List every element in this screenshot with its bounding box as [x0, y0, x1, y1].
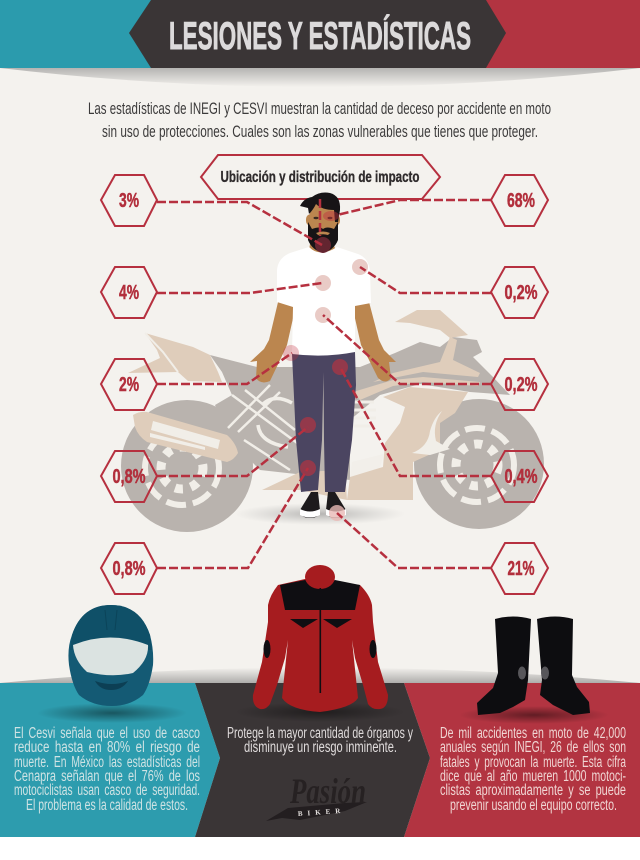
stat: 4% [101, 267, 157, 318]
stat: 0,8% upper [101, 451, 157, 502]
shoes [300, 492, 346, 518]
item shadows [37, 702, 609, 724]
logo: Pasión Biker: BIKER [298, 807, 346, 818]
stat: 2%: 2% [119, 374, 139, 396]
frame and engine [210, 337, 510, 480]
icon: boots [477, 616, 590, 715]
bottom shadow arc [0, 668, 640, 683]
stat: 0,4%: 0,4% [504, 466, 538, 488]
logo: Pasión Biker: Pasión [289, 771, 366, 811]
ground shadow [235, 503, 405, 525]
stat: 0,2% upper [491, 267, 548, 318]
panel: jacket (dark) [195, 683, 430, 837]
heading badge: impact location: Ubicación y distribución de impacto [220, 169, 420, 186]
stat: 0,2% lower [491, 359, 548, 410]
motorcycle illustration [121, 310, 544, 532]
text: helmet: muerte. En México las estadísticas del [14, 754, 200, 771]
stat: 0,2% lower: 0,2% [504, 374, 538, 396]
exhaust [133, 412, 238, 462]
logo: Pasión Biker [266, 771, 367, 821]
arms and hands [250, 298, 396, 382]
stat: 68%: 68% [507, 190, 535, 212]
stat: 3% [101, 175, 157, 226]
text: jacket [227, 725, 413, 756]
front fairing [262, 310, 480, 500]
connector from heading [319, 199, 321, 236]
intro text [88, 99, 551, 141]
connector lines [157, 200, 491, 568]
panel: red [404, 683, 640, 837]
text: helmet: Cenapra señalan que el 76% de los [14, 768, 200, 785]
header band [0, 0, 640, 87]
tail fairing [128, 333, 222, 382]
icon: helmet [68, 605, 153, 706]
text: helmet [14, 725, 200, 814]
text: helmet: El Cesvi señala que el uso de casco [14, 725, 200, 742]
stat: 21% [491, 543, 548, 594]
text: helmet: El problema es la calidad de estos. [26, 797, 188, 814]
text: jacket: disminuye un riesgo inminente. [244, 739, 397, 756]
text: helmet: reduce hasta en 80% el riesgo de [14, 739, 200, 756]
stat: 3%: 3% [119, 190, 139, 212]
panel: helmet (teal) [0, 683, 220, 837]
stat: 0,2% upper: 0,2% [504, 282, 538, 304]
front wheel [414, 399, 544, 529]
head [300, 192, 340, 253]
text: helmet: motociclistas usan casco de seguridad. [14, 782, 200, 799]
stat: 21%: 21% [508, 558, 535, 580]
stat: 0,8% lower: 0,8% [112, 558, 146, 580]
stat: 68% [491, 175, 548, 226]
person figure [250, 192, 396, 518]
text: jacket: Protege la mayor cantidad de órganos y [227, 725, 413, 742]
icon: jacket [253, 565, 388, 712]
stat: 0,4% [491, 451, 548, 502]
stat: 4%: 4% [119, 282, 139, 304]
stat: 0,8% upper: 0,8% [112, 466, 146, 488]
rear wheel [121, 400, 253, 532]
heading badge: impact location [201, 155, 440, 199]
impact spots [283, 211, 368, 521]
stat: 2% [101, 359, 157, 410]
pants [292, 352, 356, 492]
text: boots [440, 725, 626, 814]
stat: 0,8% lower [101, 543, 157, 594]
neck and t-shirt [309, 244, 336, 256]
